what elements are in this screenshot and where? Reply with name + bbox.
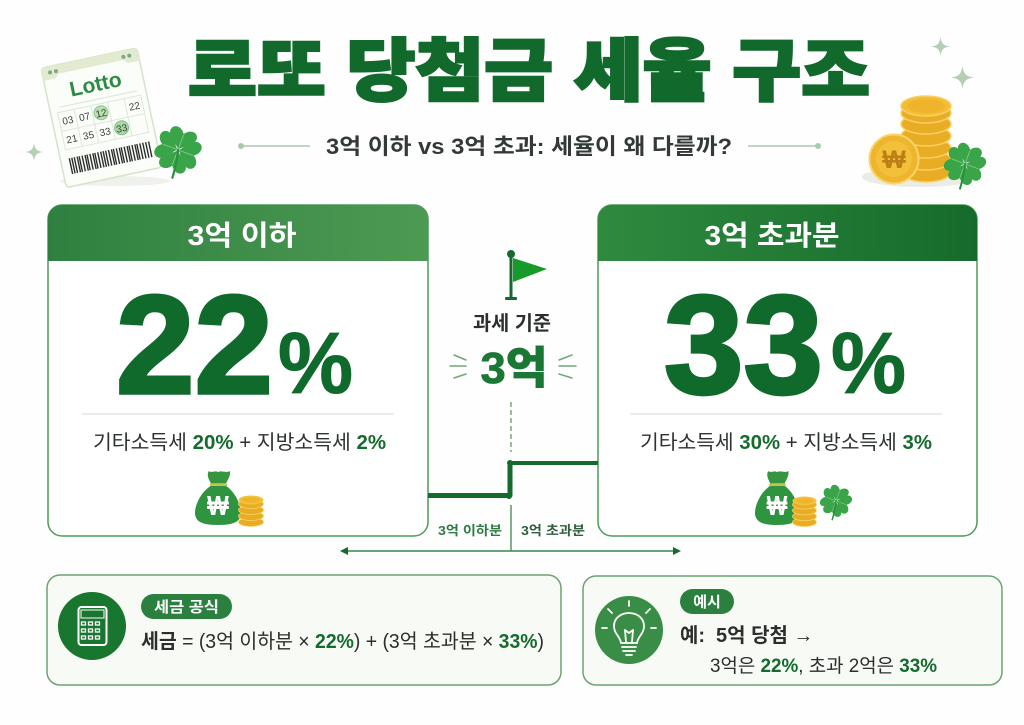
icon: lotto ticket: 03 [62, 115, 75, 128]
icon: lotto ticket: Lotto [68, 68, 124, 101]
icon: lotto ticket: 12 [95, 108, 108, 121]
rate: 22%: % [278, 316, 353, 412]
panel: example [583, 576, 1002, 685]
rate: 33% [664, 266, 906, 423]
icon: clover by coins [942, 141, 988, 189]
example text line 1: 5억 당첨 → [716, 624, 813, 647]
threshold label: 과세 기준 [473, 312, 551, 335]
icon: clover by ticket [153, 125, 203, 178]
icon: lotto ticket: 07 [78, 111, 92, 124]
icon: lotto ticket [41, 48, 170, 188]
range label: 3억 이하분: 3억 이하분 [438, 523, 502, 538]
breakdown text: 기타소득세 30% + 지방소득세 3% [640, 431, 932, 454]
step line chart [428, 460, 598, 499]
icon: flag [505, 250, 547, 300]
threshold dashed line [510, 402, 512, 452]
icon: light bulb [595, 596, 663, 664]
icon: calculator [58, 592, 126, 660]
icon: sparkles right [931, 37, 974, 89]
badge: 세금 공식 [141, 594, 232, 619]
panel: tax formula [47, 575, 561, 685]
example text line 1: 예: [680, 624, 705, 647]
icon: sparkle left [25, 143, 43, 161]
range arrow [340, 505, 681, 555]
badge: 예시: 예시 [693, 594, 721, 611]
formula text: 세금 = (3억 이하분 × 22%) + (3억 초과분 × 33%) [141, 630, 544, 653]
range label: 3억 초과분: 3억 초과분 [521, 523, 585, 538]
icon: lotto ticket: 33 [115, 123, 129, 136]
badge: 예시 [680, 589, 734, 614]
threshold burst lines [450, 355, 576, 378]
icon: gold coin stack [862, 96, 978, 187]
rate: 33%: % [831, 316, 906, 412]
example text line 2: 3억은 22%, 초과 2억은 33% [710, 655, 937, 677]
threshold value: 3억: 3억 [480, 344, 548, 393]
rate: 22%: 22 [116, 266, 273, 423]
rate: 33%: 33 [664, 266, 823, 423]
subtitle: 3억 이하 vs 3억 초과: 세율이 왜 다를까? [326, 134, 732, 159]
panel: 3억 초과분 [598, 205, 977, 536]
icon: gold coin stack: ₩ [882, 146, 906, 174]
rate: 22% [116, 266, 353, 423]
panel: 3억 이하 [48, 205, 428, 536]
icon: lotto ticket: 21 [65, 133, 79, 146]
heading text: 3억 초과분 [704, 220, 840, 251]
title: 로또 당첨금 세율 구조 [188, 34, 870, 110]
icon: lotto ticket: 33 [99, 126, 112, 139]
icon: money bag and coins [195, 471, 264, 526]
breakdown text: 기타소득세 20% + 지방소득세 2% [93, 431, 386, 454]
heading text: 3억 이하 [188, 220, 297, 251]
subtitle [238, 134, 821, 159]
header: 3억 초과분 [598, 205, 977, 261]
badge: 세금 공식: 세금 공식 [154, 599, 219, 616]
header: 3억 이하 [48, 205, 428, 261]
icon: money bag, coins and clover [755, 471, 853, 527]
icon: lotto ticket: 22 [128, 101, 142, 114]
icon: lotto ticket: 35 [82, 130, 96, 143]
